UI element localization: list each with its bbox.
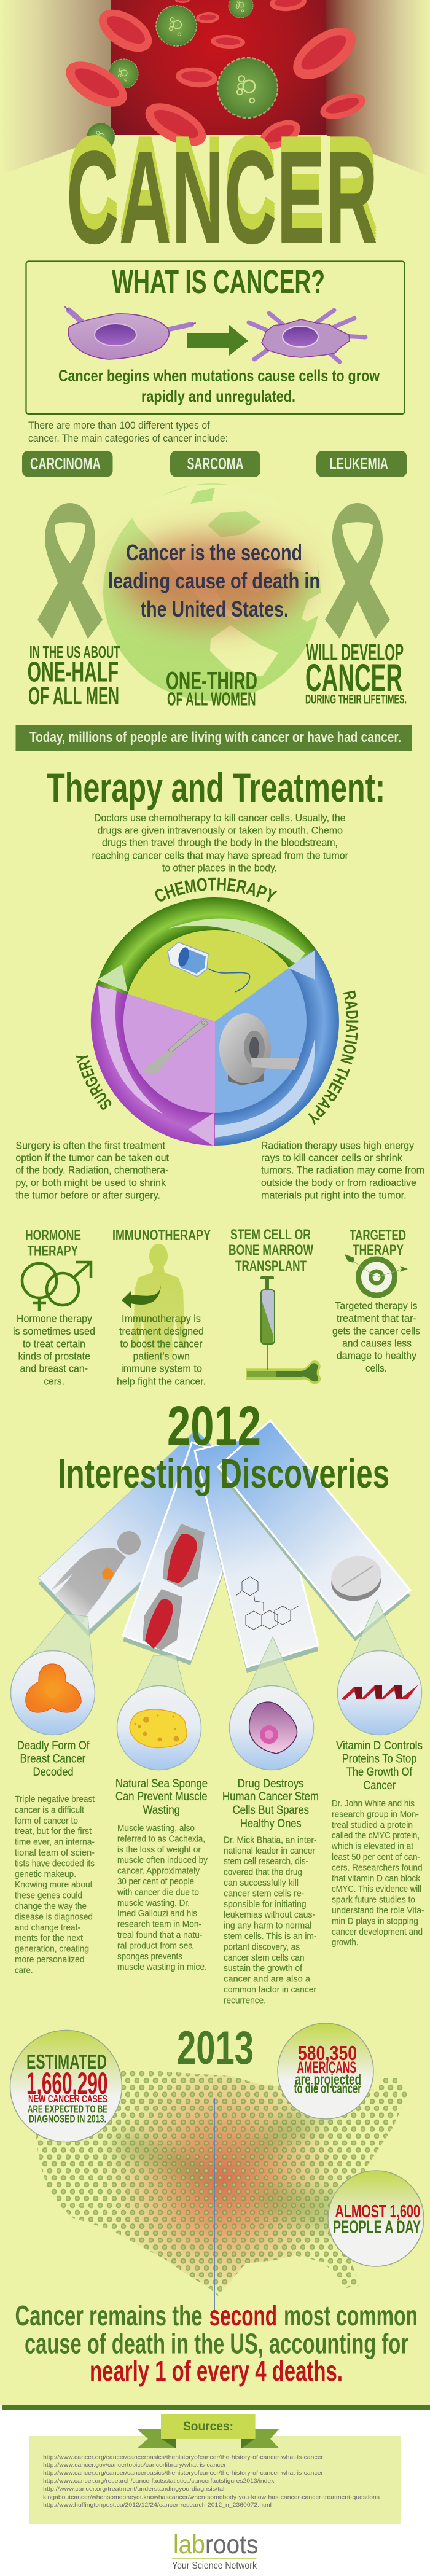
body text: common factor in cancer <box>224 1985 316 1995</box>
body text: which is elevated in at <box>331 1841 414 1852</box>
text: radiation description: materials put right into the tumor. <box>261 1190 407 1201</box>
body text: is the loss of weight or <box>117 1844 201 1855</box>
text: source links <box>43 2454 380 2508</box>
column: stem cell or bone marrow transplant <box>229 1227 321 1384</box>
body text: min D plays in stopping <box>332 1916 418 1926</box>
heading: 2012: 2012 <box>167 1395 261 1458</box>
body text: called the cMYC protein, <box>332 1830 420 1841</box>
title: Deadly Form Of <box>17 1739 90 1752</box>
body text: change the way the <box>15 1901 87 1911</box>
statistic: one-half of all men <box>28 642 120 710</box>
label: chemotherapy: CHEMOTHERAPY <box>155 877 278 902</box>
text: hormone description: Hormone therapy <box>17 1314 93 1325</box>
body text: genetic makeup. <box>15 1869 76 1879</box>
title: Cells But Spares <box>233 1804 309 1817</box>
title: Wasting <box>143 1804 180 1817</box>
panel: sources <box>29 2414 401 2524</box>
text: immunotherapy description: treatment designed <box>119 1326 204 1337</box>
text: targeted description: damage to healthy <box>337 1350 417 1361</box>
text: source links: http://www.cancer.org/research/cancerfactsstatistics/cancerfactsfigures2013/index <box>43 2478 275 2484</box>
statistic: one-third of all women: ONE-THIRD <box>166 666 257 695</box>
text: radiation description: tumors. The radiation may come from <box>261 1165 424 1176</box>
text: second leading cause <box>108 540 320 622</box>
body text: disease is diagnosed <box>15 1911 93 1922</box>
text: targeted description: and causes less <box>342 1338 412 1349</box>
microscope slides fan <box>38 1420 410 1673</box>
callout: almost 1,600 a day <box>328 2171 424 2266</box>
conclusion statement: Cancer remains the <box>15 2300 203 2332</box>
heading: stem cell transplant <box>229 1227 313 1274</box>
banner: living with cancer <box>16 725 412 751</box>
text: second leading cause: Cancer is the second <box>126 540 302 565</box>
body text: Knowing more about <box>15 1879 93 1890</box>
icon: left ribbon <box>37 503 103 639</box>
text: targeted description: cells. <box>366 1363 387 1374</box>
title: Decoded <box>33 1766 74 1779</box>
icon: scalpel <box>141 1019 208 1074</box>
body text: 30 per cent of people <box>117 1876 194 1887</box>
body text: muscle wasting in mice. <box>117 1962 207 1972</box>
callout: projected deaths: to die of cancer <box>294 2080 361 2096</box>
text: chemotherapy paragraph: reaching cancer cells that may have spread from the tumor <box>92 850 348 861</box>
text: targeted description <box>332 1301 420 1374</box>
title: Proteins To Stop <box>342 1753 417 1766</box>
body text: national leader in cancer <box>224 1846 315 1856</box>
text: source links: http://www.cancer.gov/cancertopics/cancerlibrary/what-is-cancer <box>43 2462 227 2469</box>
magnifier cone <box>126 1655 190 1714</box>
body text: time ever, an interna- <box>15 1837 95 1848</box>
text: chemotherapy paragraph: drugs are given intravenously or taken by mouth. Chemo <box>97 824 343 837</box>
body text: referred to as Cachexia, <box>117 1833 205 1844</box>
column: targeted therapy <box>332 1227 420 1374</box>
text: source links: http://www.cancer.org/treatment/understandingyourdiagnsis/tal- <box>43 2486 227 2492</box>
text: immunotherapy description: patient's own <box>133 1351 190 1362</box>
body text: cancer development and <box>332 1927 423 1937</box>
body text: Dr. Mick Bhatia, an inter- <box>224 1835 317 1845</box>
body text: cancer is a difficult <box>15 1805 85 1815</box>
text: hormone description: kinds of prostate <box>18 1351 90 1362</box>
body text: sustain the growth of <box>224 1963 303 1973</box>
segment: chemotherapy ring <box>96 897 316 1021</box>
body text: these genes could <box>15 1891 82 1901</box>
body text: ing any harm to normal <box>224 1921 311 1931</box>
body text <box>117 1823 208 1972</box>
statistic: one-half of all men: IN THE US ABOUT <box>29 642 120 662</box>
body text: cers. Researchers found <box>332 1862 423 1873</box>
heading: targeted therapy: TARGETED <box>350 1227 406 1244</box>
discovery: drug destroys stem cells <box>222 1637 319 2005</box>
body text: spark future studies to <box>332 1895 415 1905</box>
text: hormone description: to treat certain <box>23 1338 85 1349</box>
body text: covered that the drug <box>224 1867 302 1878</box>
text: chemotherapy paragraph: Doctors use chemotherapy to kill cancer cells. Usually, the <box>94 812 345 824</box>
text: hormone description: is sometimes used <box>13 1326 95 1337</box>
callout: projected deaths: 580,350 <box>298 2042 357 2064</box>
text: targeted description: gets the cancer cells <box>332 1325 420 1337</box>
text: immunotherapy description: help fight the cancer. <box>117 1376 206 1387</box>
text: immunotherapy description: immune system to <box>121 1364 202 1375</box>
body text: Muscle wasting, also <box>117 1823 195 1833</box>
text: source links: http://www.cancer.org/cancer/cancerbasics/thehistoryofcancer/the-history-of-cancer-what-is-cancer <box>43 2454 324 2461</box>
title <box>222 1778 319 1830</box>
body text: recurrence. <box>224 1995 266 2005</box>
text: definition <box>58 366 380 405</box>
body text: tional team of scien- <box>15 1848 95 1858</box>
callout: estimated new cases: DIAGNOSED IN 2013. <box>29 2113 106 2125</box>
body text: more personalized <box>15 1954 85 1965</box>
body text: Imed Gallouzi and his <box>117 1908 197 1919</box>
text: immunotherapy description: to boost the cancer <box>120 1338 203 1349</box>
text: source links: http://www.cancer.org/cancer/cancerbasics/thehistoryofcancer/the-history-of-cancer-what-is-cancer <box>43 2470 324 2476</box>
text: source links: http://www.huffingtonpost.ca/2012/12/24/cancer-research-2012_n_2360072.html <box>43 2502 272 2508</box>
text: second leading cause: the United States. <box>141 596 289 622</box>
body text: form of cancer to <box>15 1816 78 1826</box>
callout: estimated new cases <box>10 2031 122 2142</box>
label: radiation therapy: RADIATION THERAPY <box>308 990 359 1125</box>
statistic: one-third of all women: OF ALL WOMEN <box>167 689 256 710</box>
body text: cancer stem cells re- <box>224 1888 305 1899</box>
text: chemotherapy paragraph: to other places in the body. <box>162 862 277 873</box>
body text: and change treat- <box>15 1922 80 1933</box>
segment: surgery ring <box>91 985 215 1146</box>
heading: stem cell transplant: STEM CELL OR <box>230 1227 311 1243</box>
text: chemotherapy paragraph: drugs then travel through the body in the bloodstream, <box>102 837 338 849</box>
callout: projected deaths: AMERICANS <box>297 2058 356 2077</box>
discovery: breast cancer decoded <box>11 1614 95 1975</box>
text: surgery description: py, or both might be used to shrink <box>15 1177 166 1188</box>
magnifier cone <box>14 1614 93 1677</box>
heading: hormone therapy: THERAPY <box>28 1243 78 1260</box>
slide: human body <box>38 1430 248 1636</box>
body text: cancer. Approximately <box>117 1866 200 1876</box>
body text: ments for the next <box>15 1933 84 1943</box>
chart: dotted US heat map <box>36 2069 408 2311</box>
body text <box>15 1794 95 1975</box>
hero illustration: blood vessel with cells <box>0 0 430 184</box>
text: surgery description: option if the tumor can be taken out <box>15 1152 169 1164</box>
statistic: will develop cancer <box>305 640 407 707</box>
heading: immunotherapy: IMMUNOTHERAPY <box>112 1227 211 1244</box>
heading: hormone therapy <box>25 1227 81 1260</box>
title: Breast Cancer <box>20 1753 86 1766</box>
panel: what is cancer <box>26 262 404 414</box>
icon: right ribbon <box>325 503 390 639</box>
text: targeted description: treatment that tar- <box>337 1313 416 1324</box>
body text <box>224 1835 317 2005</box>
text: radiation description <box>261 1139 424 1201</box>
callout: estimated new cases: 1,660,290 <box>26 2066 108 2101</box>
icon: normal cell <box>65 307 195 359</box>
pill: leukemia: LEUKEMIA <box>330 455 388 473</box>
heading: targeted therapy <box>350 1227 406 1259</box>
icon: syringe into bone <box>246 1276 321 1384</box>
heading: stem cell transplant: TRANSPLANT <box>235 1258 307 1274</box>
arrow: cell mutation <box>187 325 248 356</box>
body text: tists have decoded its <box>15 1858 95 1868</box>
globe with statistic <box>103 483 321 701</box>
pill: carcinoma <box>22 451 113 477</box>
slide: muscles <box>123 1442 260 1665</box>
statistic: one-third of all women <box>166 666 257 710</box>
slide: molecule <box>195 1434 318 1673</box>
text: surgery description: Surgery is often the first treatment <box>15 1139 165 1151</box>
body text: Triple negative breast <box>15 1794 95 1805</box>
icon: lens with protein <box>338 1651 421 1735</box>
statistic: one-half of all men: OF ALL MEN <box>28 682 119 710</box>
title: Cancer <box>364 1779 396 1792</box>
body text: treal found that a natu- <box>117 1930 203 1940</box>
pill: sarcoma <box>170 451 260 477</box>
icon: body with arrow <box>122 1244 187 1375</box>
callout: estimated new cases: NEW CANCER CASES <box>28 2093 108 2105</box>
body text <box>331 1798 424 1948</box>
discovery: sea sponge <box>115 1655 208 1972</box>
text: definition: rapidly and unregulated. <box>141 387 295 405</box>
body text: portant discovery, as <box>224 1942 300 1952</box>
banner: sources <box>137 2414 279 2448</box>
icon: IV bag <box>168 942 250 992</box>
callout: projected deaths: are projected <box>295 2071 361 2088</box>
text: chemotherapy paragraph <box>92 812 348 873</box>
body text: sponges prevents <box>117 1951 182 1962</box>
text: types intro: There are more than 100 different types of <box>28 420 210 431</box>
text: radiation description: outside the body or from radioactive <box>261 1177 416 1188</box>
pill: sarcoma: SARCOMA <box>187 455 243 473</box>
banner: sources: Sources: <box>183 2419 233 2434</box>
title: Drug Destroys <box>238 1778 304 1790</box>
body text: leukemias without caus- <box>224 1910 315 1920</box>
body text: cancer and are also a <box>224 1974 311 1985</box>
icon: lens with breast cancer cell <box>11 1651 95 1735</box>
magnifier cone <box>344 1600 413 1677</box>
title: The Growth Of <box>346 1766 413 1779</box>
body text: with cancer die due to <box>117 1887 199 1897</box>
slide: pill <box>218 1420 410 1641</box>
body text: care. <box>15 1965 33 1975</box>
body text: sponsible for initiating <box>224 1899 307 1910</box>
body text: muscle often induced by <box>117 1855 208 1865</box>
body text: treal studied a protein <box>332 1820 413 1830</box>
footer background <box>0 2405 430 2576</box>
body text: Dr. John White and his <box>332 1798 415 1809</box>
body text: growth. <box>332 1937 359 1948</box>
body text: cancer stem cells can <box>224 1953 305 1963</box>
icon: lens with cell <box>230 1685 313 1770</box>
title: Human Cancer Stem <box>222 1790 319 1803</box>
column: immunotherapy <box>112 1227 211 1387</box>
text: hormone description <box>13 1314 95 1387</box>
title: Can Prevent Muscle <box>115 1790 208 1803</box>
statistic: one-half of all men: ONE-HALF <box>28 656 119 688</box>
logo: labroots: labroots <box>173 2530 258 2559</box>
text: second leading cause: leading cause of death in <box>108 568 320 593</box>
title <box>336 1739 423 1792</box>
discovery: vitamin D <box>331 1600 424 1948</box>
callout: projected deaths <box>278 2023 373 2119</box>
body text: research team in Mon- <box>117 1919 201 1930</box>
magnifier cone <box>237 1637 307 1714</box>
heading: targeted therapy: THERAPY <box>353 1242 404 1259</box>
text: radiation description: Radiation therapy uses high energy <box>261 1139 414 1151</box>
body text: ral product from sea <box>117 1940 194 1951</box>
logo: labroots: Your Science Network <box>172 2561 257 2571</box>
text: types intro <box>28 420 228 444</box>
title <box>17 1739 90 1779</box>
heading: hormone therapy: HORMONE <box>25 1227 81 1244</box>
conclusion statement: second <box>209 2300 277 2332</box>
title: Healthy Ones <box>240 1817 302 1830</box>
text: hormone description: and breast can- <box>20 1364 88 1375</box>
conclusion statement <box>15 2300 418 2387</box>
icon: mutated cell <box>249 310 366 362</box>
body text: least 50 per cent of can- <box>332 1852 420 1862</box>
icon: lens with sponge <box>117 1685 201 1770</box>
text: surgery description: of the body. Radiation, chemothera- <box>15 1165 168 1176</box>
body text: stem cells. This is an im- <box>224 1931 317 1942</box>
text: radiation description: rays to kill cancer cells or shrink <box>261 1152 402 1164</box>
chart: treatment cycle wheel <box>91 897 339 1146</box>
column: hormone therapy <box>13 1227 95 1387</box>
title <box>115 1778 208 1817</box>
body text: understand the role Vita- <box>332 1905 424 1916</box>
callout: estimated new cases: ARE EXPECTED TO BE <box>28 2103 108 2115</box>
text: surgery description <box>15 1139 169 1201</box>
label: surgery: SURGERY <box>76 1055 112 1110</box>
body text: generation, creating <box>15 1944 89 1954</box>
icon: gender symbols <box>22 1262 91 1311</box>
text: types intro: cancer. The main categories of cancer include: <box>28 432 228 444</box>
heading: what is cancer: WHAT IS CANCER? <box>112 263 325 300</box>
title: Natural Sea Sponge <box>115 1778 208 1790</box>
icon: target with arrows <box>345 1254 408 1298</box>
logo: labroots <box>172 2530 258 2571</box>
icon: scanner <box>219 1013 299 1085</box>
body text: research group in Mon- <box>332 1809 419 1819</box>
body text: treat, but for the first <box>15 1826 92 1836</box>
body text: muscle wasting. Dr. <box>117 1898 190 1908</box>
heading: 2013: 2013 <box>177 2022 254 2074</box>
text: surgery description: the tumor before or after surgery. <box>15 1190 160 1201</box>
body text: stem cell research, dis- <box>224 1856 308 1867</box>
pill: leukemia <box>316 451 407 477</box>
text: targeted description: Targeted therapy is <box>335 1301 418 1312</box>
text: hormone description: cers. <box>44 1376 64 1387</box>
body text: that vitamin D can block <box>332 1873 420 1884</box>
text: source links: kingaboutcancer/whensomeoneyouknowhascancer/when-somebody-you-know-has-cancer-cancer-treatment-questions <box>43 2494 380 2500</box>
heading: stem cell transplant: BONE MARROW <box>229 1242 313 1259</box>
body text: can successfully kill <box>224 1878 299 1888</box>
callout: estimated new cases: ESTIMATED <box>26 2050 107 2073</box>
text: immunotherapy description <box>117 1314 206 1387</box>
pill: carcinoma: CARCINOMA <box>30 455 101 473</box>
text: immunotherapy description: Immunotherapy is <box>122 1314 201 1325</box>
segment: radiation ring <box>215 949 339 1146</box>
